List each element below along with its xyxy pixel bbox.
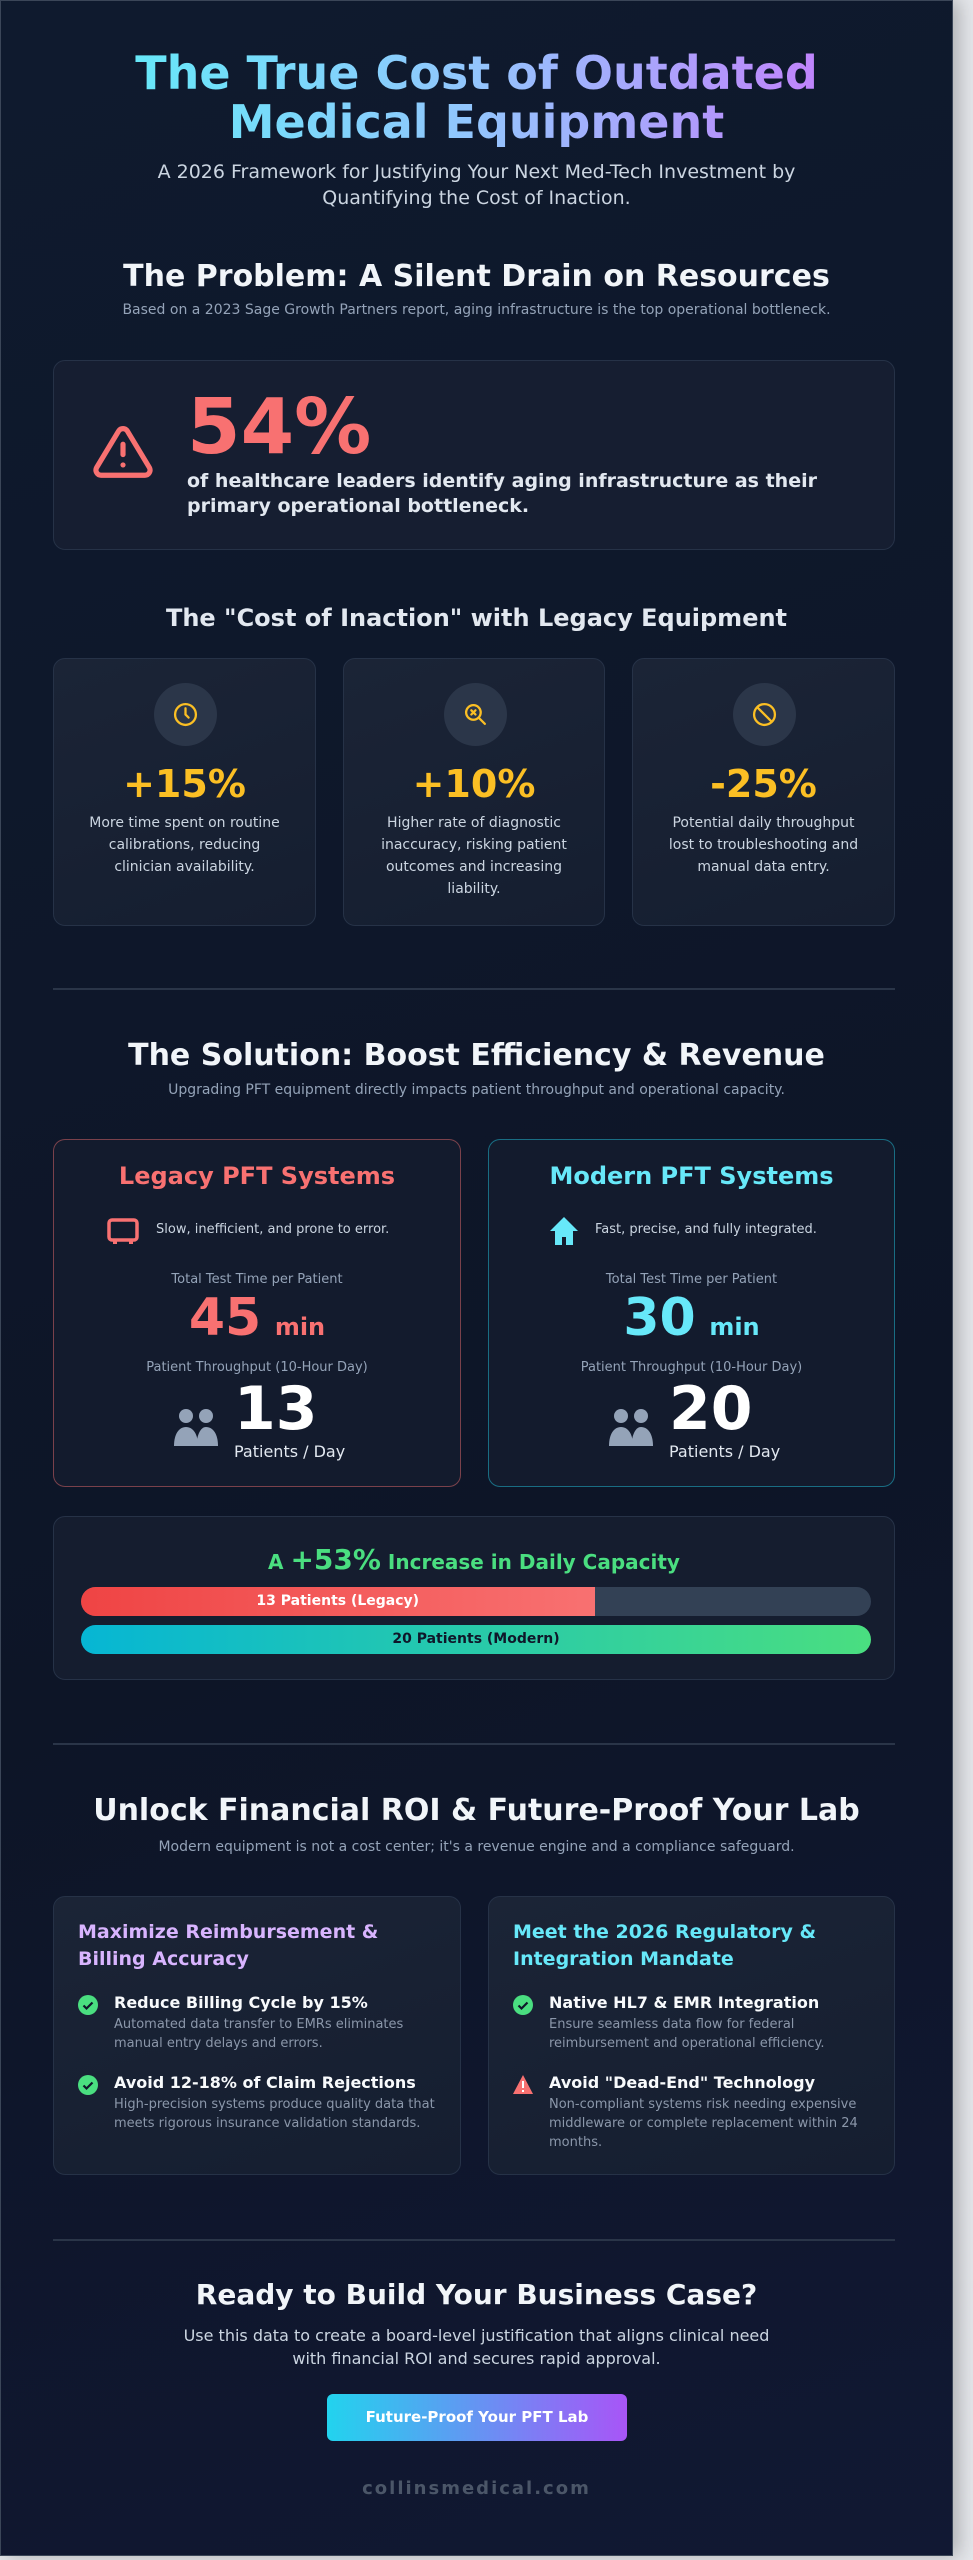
panel: diagnostic stat: [343, 658, 605, 926]
icon: ban: [733, 683, 796, 746]
heading: cost of inaction: The "Cost of Inaction" with Legacy Equipment: [166, 604, 787, 632]
reimbursement title: [78, 1921, 378, 1970]
heading: the problem: The Problem: A Silent Drain on Resources: [123, 259, 830, 294]
value: 20 patients: [609, 1374, 780, 1461]
subtitle: [158, 161, 795, 209]
panel: calibration stat: [53, 658, 316, 926]
panel: capacity increase chart: [53, 1516, 895, 1680]
regulatory title: Meet the 2026 Regulatory &: [513, 1921, 816, 1943]
label: test time: Total Test Time per Patient: [171, 1272, 343, 1287]
panel: reimbursement: [53, 1896, 461, 2175]
heading: the solution: The Solution: Boost Efficiency & Revenue: [128, 1038, 825, 1073]
item: billing cycle: Automated data transfer to EMRs eliminates manual entry delays and errors.: [114, 2017, 403, 2051]
stat text: +15%: [123, 762, 246, 806]
cta text: Use this data to create a board-level justification that aligns clinical need: [184, 2326, 769, 2345]
value: 13 patients: [174, 1374, 345, 1461]
stat text: -25%: [710, 762, 817, 806]
panel: throughput stat: [632, 658, 895, 926]
legacy title: Legacy PFT Systems: [119, 1162, 395, 1190]
panel: regulatory: [488, 1896, 895, 2175]
item: claim rejections: [78, 2073, 435, 2131]
item: billing cycle: [78, 1993, 403, 2051]
item: HL7: Native HL7 & EMR Integration: [549, 1993, 819, 2012]
footer url: collinsmedical.com: [362, 2478, 591, 2499]
reimbursement title: Maximize Reimbursement &: [78, 1921, 378, 1943]
value: 13 patients: Patients / Day: [234, 1442, 345, 1461]
item: claim rejections: High-precision systems produce quality data that meets rigorous insurance validation standards.: [114, 2097, 435, 2131]
icon: warning triangle: [93, 426, 153, 478]
subtext: solution: Upgrading PFT equipment directly impacts patient throughput and operational capacity.: [168, 1082, 785, 1098]
bar: modern: 20 Patients (Modern): [392, 1631, 560, 1647]
icon: house: [550, 1217, 578, 1245]
big stat 54%: 54%: [187, 383, 371, 472]
modern description: Fast, precise, and fully integrated.: [595, 1222, 817, 1237]
cta text: [184, 2326, 769, 2368]
item: dead-end tech: [513, 2073, 858, 2150]
icon: people: [609, 1409, 653, 1446]
icon: people: [174, 1409, 218, 1446]
cta text: with financial ROI and secures rapid approval.: [292, 2349, 661, 2368]
regulatory title: Integration Mandate: [513, 1948, 734, 1970]
regulatory title: [513, 1921, 816, 1970]
item: claim rejections: Avoid 12-18% of Claim Rejections: [114, 2073, 416, 2092]
icon: clock: [154, 683, 217, 746]
item: HL7: Ensure seamless data flow for federal reimbursement and operational efficiency.: [549, 2017, 824, 2051]
label: throughput: Patient Throughput (10-Hour Day): [581, 1360, 802, 1375]
stat text: Potential daily throughput lost to troubleshooting and manual data entry.: [669, 815, 858, 875]
button: [327, 2394, 627, 2441]
icon: old monitor: [107, 1218, 139, 1244]
item: billing cycle: Reduce Billing Cycle by 15%: [114, 1993, 368, 2012]
stat description: of healthcare leaders identify aging infrastructure as their primary operational bottleneck.: [187, 470, 817, 517]
panel: modern systems: [488, 1139, 895, 1487]
subtitle: A 2026 Framework for Justifying Your Next Med-Tech Investment by: [158, 161, 795, 183]
stat text: [669, 762, 858, 875]
value: 20 patients: 20: [669, 1374, 752, 1444]
button: Future-Proof Your PFT Lab: [366, 2408, 588, 2426]
subtext: problem source: Based on a 2023 Sage Growth Partners report, aging infrastructure is the top operational bottleneck.: [122, 302, 831, 318]
title: [135, 46, 818, 149]
bar: modern: [81, 1625, 871, 1654]
label: test time: Total Test Time per Patient: [606, 1272, 777, 1287]
stat text: Higher rate of diagnostic inaccuracy, risking patient outcomes and increasing liability.: [381, 815, 567, 897]
bar: legacy: 13 Patients (Legacy): [256, 1593, 419, 1609]
value: 30 min: 30 min: [623, 1288, 760, 1348]
value: 20 patients: Patients / Day: [669, 1442, 780, 1461]
subtitle: Quantifying the Cost of Inaction.: [322, 187, 631, 209]
capacity heading: A +53% Increase in Daily Capacity: [268, 1543, 680, 1576]
item: HL7: [513, 1993, 824, 2051]
reimbursement title: Billing Accuracy: [78, 1948, 249, 1970]
heading: call to action: Ready to Build Your Business Case?: [196, 2278, 757, 2311]
legacy description: Slow, inefficient, and prone to error.: [156, 1222, 389, 1237]
stat text: More time spent on routine calibrations, reducing clinician availability.: [89, 815, 280, 875]
bar: legacy: [81, 1587, 871, 1616]
label: throughput: Patient Throughput (10-Hour Day): [146, 1360, 368, 1375]
stat text: [381, 762, 567, 897]
item: dead-end tech: Avoid "Dead-End" Technology: [549, 2073, 815, 2092]
title: The True Cost of Outdated: [135, 46, 818, 100]
panel: legacy systems: [53, 1139, 461, 1487]
subtext: ROI: Modern equipment is not a cost center; it's a revenue engine and a compliance safeguard.: [158, 1839, 795, 1855]
stat text: [89, 762, 280, 875]
item: dead-end tech: Non-compliant systems risk needing expensive middleware or complete replacement within 24 months.: [549, 2097, 858, 2150]
stat text: +10%: [413, 762, 535, 806]
modern title: Modern PFT Systems: [549, 1162, 834, 1190]
value: 45 min: 45 min: [189, 1288, 325, 1348]
heading: financial ROI: Unlock Financial ROI & Future-Proof Your Lab: [93, 1793, 860, 1828]
title: Medical Equipment: [229, 95, 724, 149]
value: 13 patients: 13: [234, 1374, 318, 1444]
icon: search x: [444, 683, 507, 746]
panel: 54% stat: [53, 360, 895, 550]
